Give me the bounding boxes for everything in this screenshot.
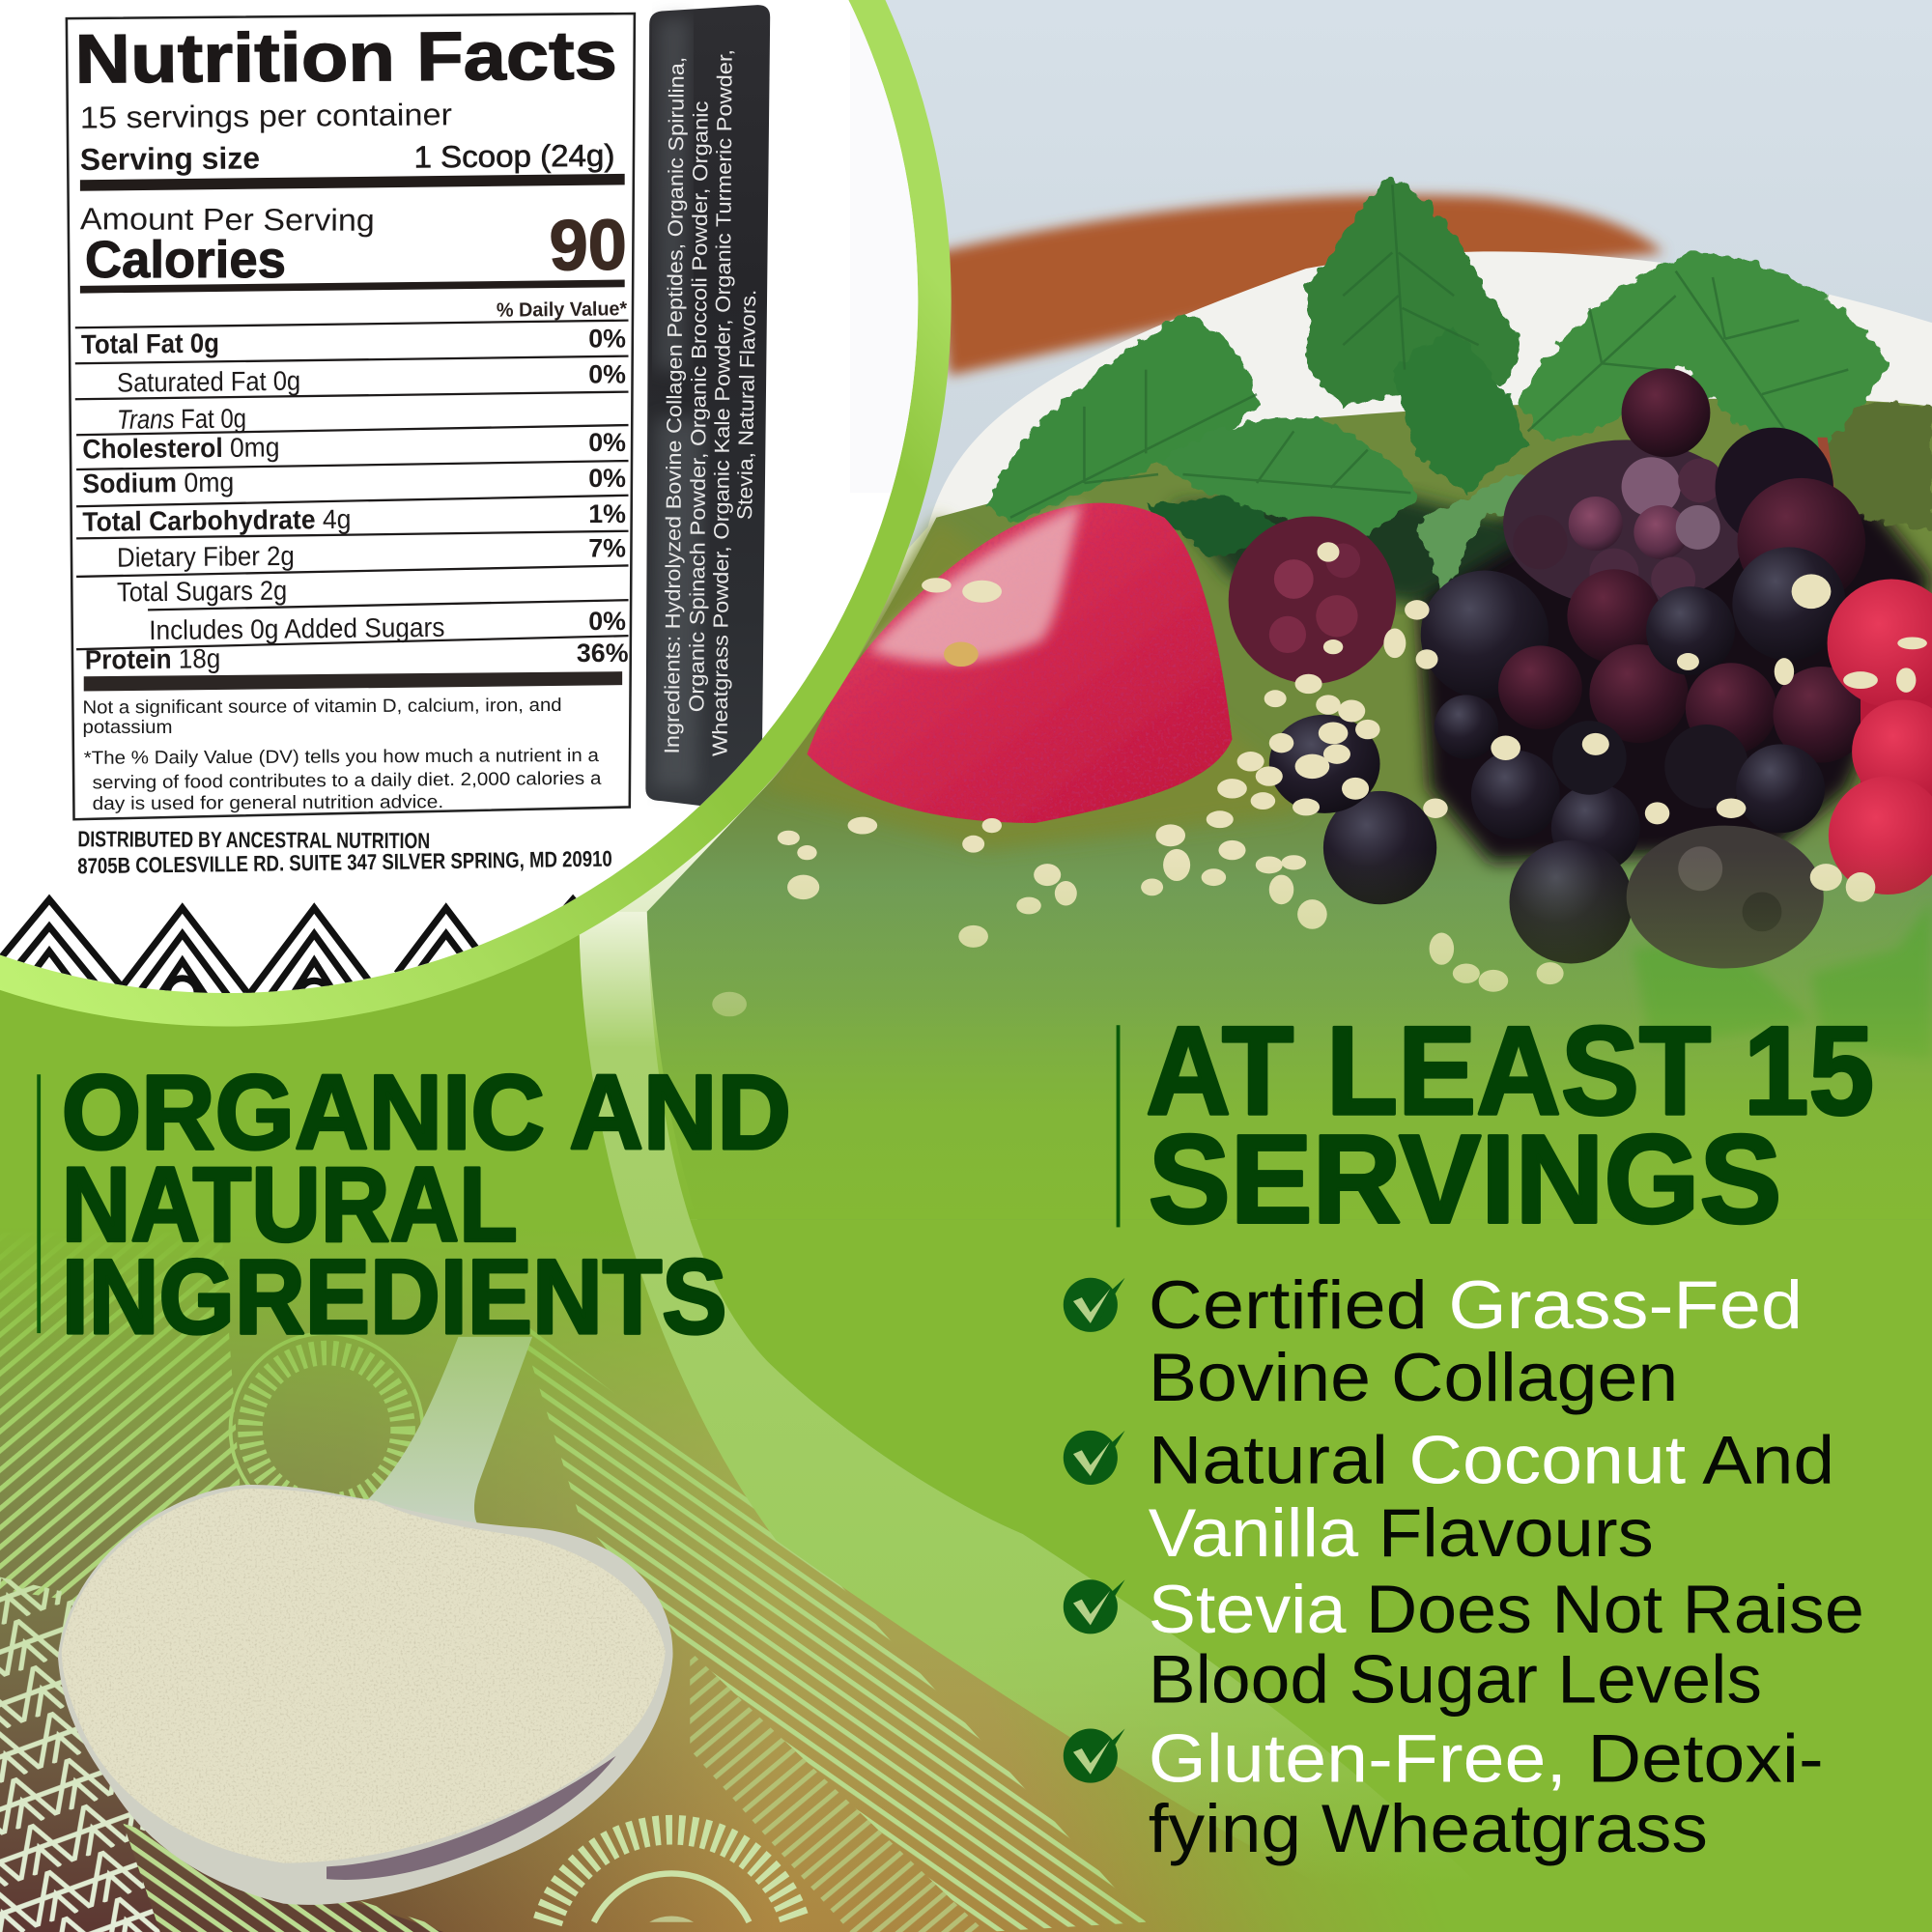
nutrient rows: Total Sugars 2g xyxy=(117,576,287,607)
background: sky and terracotta plate xyxy=(0,0,1932,863)
nutrient rows: 0% xyxy=(588,360,626,389)
blueberries xyxy=(1421,571,1548,698)
nutrient rows: 0% xyxy=(588,607,626,636)
bowl: outer side xyxy=(579,370,1932,1932)
distributor address: 8705B COLESVILLE RD. SUITE 347 SILVER SPRING, MD 20910 xyxy=(77,846,612,878)
footnotes: Not a significant source of vitamin D, calcium, iron, and xyxy=(82,696,562,719)
nutrient rows: Total Fat 0g xyxy=(81,328,219,359)
servings: Serving size xyxy=(80,140,260,177)
heading: organic and natural ingredients: NATURAL xyxy=(62,1146,518,1264)
ingredient strip xyxy=(645,5,770,813)
nutrient rows: Saturated Fat 0g xyxy=(117,366,300,398)
calories: 90 xyxy=(549,204,627,285)
calories: Amount Per Serving xyxy=(80,201,375,238)
calories: Calories xyxy=(85,232,286,289)
nutrient rows: 0% xyxy=(588,464,626,493)
ring xyxy=(0,0,934,1009)
bowl toppings xyxy=(712,179,1932,1060)
benefits list xyxy=(1064,1266,1864,1866)
distributor address: DISTRIBUTED BY ANCESTRAL NUTRITION xyxy=(77,826,430,853)
ingredient text: Stevia, Natural Flavors. xyxy=(732,289,760,520)
heading: organic and natural ingredients: ORGANIC AND xyxy=(62,1054,791,1172)
item 2 xyxy=(1149,1422,1834,1571)
heading: organic and natural ingredients: INGREDIENTS xyxy=(62,1238,727,1356)
heading: organic and natural ingredients xyxy=(37,1054,791,1356)
nutrition facts panel xyxy=(67,14,635,819)
ingredient text xyxy=(660,49,760,756)
calories: % Daily Value* xyxy=(497,298,627,322)
bowl light band xyxy=(579,912,1528,1932)
powder xyxy=(62,1489,666,1863)
product label disc with green ring xyxy=(0,0,934,1010)
faded foreground leaves xyxy=(1633,899,1932,1060)
item 3 xyxy=(1149,1571,1864,1718)
item 2: Natural Coconut And xyxy=(1149,1422,1834,1498)
item 2: Vanilla Flavours xyxy=(1149,1494,1654,1571)
nutrient rows xyxy=(75,321,629,692)
nutrient rows: 36% xyxy=(577,639,629,668)
lower right green corner xyxy=(985,1540,1932,1932)
nutrient rows: Dietary Fiber 2g xyxy=(117,541,295,573)
item 3: Blood Sugar Levels xyxy=(1149,1641,1762,1718)
item 1: Certified Grass-Fed xyxy=(1149,1266,1803,1343)
nutrient rows: Trans Fat 0g xyxy=(117,403,246,435)
nutrient rows: Sodium 0mg xyxy=(82,468,234,498)
footnotes: *The % Daily Value (DV) tells you how much a nutrient in a xyxy=(84,746,599,769)
heading: at least 15 servings: SERVINGS xyxy=(1149,1108,1781,1249)
spoon handle xyxy=(357,1337,532,1534)
icon: check 4 xyxy=(1064,1729,1125,1783)
footnotes: day is used for general nutrition advice. xyxy=(93,792,443,814)
panel title: Nutrition Facts xyxy=(74,17,617,98)
heading: at least 15 servings xyxy=(1117,1000,1874,1249)
item 4: Gluten-Free, Detoxi- xyxy=(1149,1719,1824,1796)
stem xyxy=(1817,438,1836,499)
spoon bowl rim xyxy=(58,1485,673,1905)
leaves xyxy=(985,179,1932,591)
nutrient rows: 1% xyxy=(588,499,626,528)
dark fruit base xyxy=(1417,493,1932,863)
tribal triangle pattern xyxy=(0,895,577,993)
icon: check 2 xyxy=(1064,1431,1125,1485)
bowl: white rim and interior xyxy=(924,251,1932,579)
footnotes: potassium xyxy=(82,718,173,738)
item 1: Bovine Collagen xyxy=(1149,1339,1678,1415)
servings: 1 Scoop (24g) xyxy=(413,138,615,174)
footnotes: serving of food contributes to a daily diet. 2,000 calories a xyxy=(93,769,602,793)
footnotes xyxy=(82,696,602,814)
item 1 xyxy=(1149,1266,1803,1415)
smoothie surface xyxy=(647,399,1932,1932)
servings xyxy=(80,97,625,191)
mixed blackberries xyxy=(1229,516,1396,684)
nutrient rows: 7% xyxy=(588,534,626,563)
background: patterned wooden table xyxy=(0,863,1932,1932)
item 3: Stevia Does Not Raise xyxy=(1149,1571,1864,1647)
hemp seeds xyxy=(712,542,1927,1016)
nutrient rows: 0% xyxy=(588,428,626,457)
icon: check 1 xyxy=(1064,1278,1125,1332)
nutrient rows: Includes 0g Added Sugars xyxy=(149,612,445,645)
calories xyxy=(80,201,627,322)
ingredient text: Ingredients: Hydrolyzed Bovine Collagen Peptides, Organic Spirulina, xyxy=(660,57,689,754)
nutrient rows: 0% xyxy=(588,325,626,354)
green fill of lower bowl xyxy=(650,1220,1932,1932)
ingredient text: Organic Spinach Powder, Organic Broccoli Powder, Organic xyxy=(684,100,713,712)
item 4 xyxy=(1149,1719,1824,1866)
ingredient text: Wheatgrass Powder, Organic Kale Powder, Organic Turmeric Powder, xyxy=(708,49,737,756)
nutrient rows: Total Carbohydrate 4g xyxy=(82,504,352,537)
green fade over smoothie and fruit xyxy=(0,850,1932,1220)
heading: at least 15 servings: AT LEAST 15 xyxy=(1146,1000,1874,1141)
leaf veins xyxy=(1010,185,1848,518)
strawberry xyxy=(807,503,1233,823)
icon: check 3 xyxy=(1064,1579,1125,1634)
nutrient rows: Cholesterol 0mg xyxy=(82,432,280,464)
nutrient rows: Protein 18g xyxy=(85,643,220,675)
raspberries right xyxy=(1861,640,1932,863)
item 4: fying Wheatgrass xyxy=(1149,1790,1708,1866)
measuring spoon with powder xyxy=(58,1337,673,1905)
green wash over table xyxy=(0,863,1932,1932)
label contents xyxy=(0,0,924,1010)
distributor address xyxy=(77,826,612,878)
servings: 15 servings per container xyxy=(80,97,453,135)
